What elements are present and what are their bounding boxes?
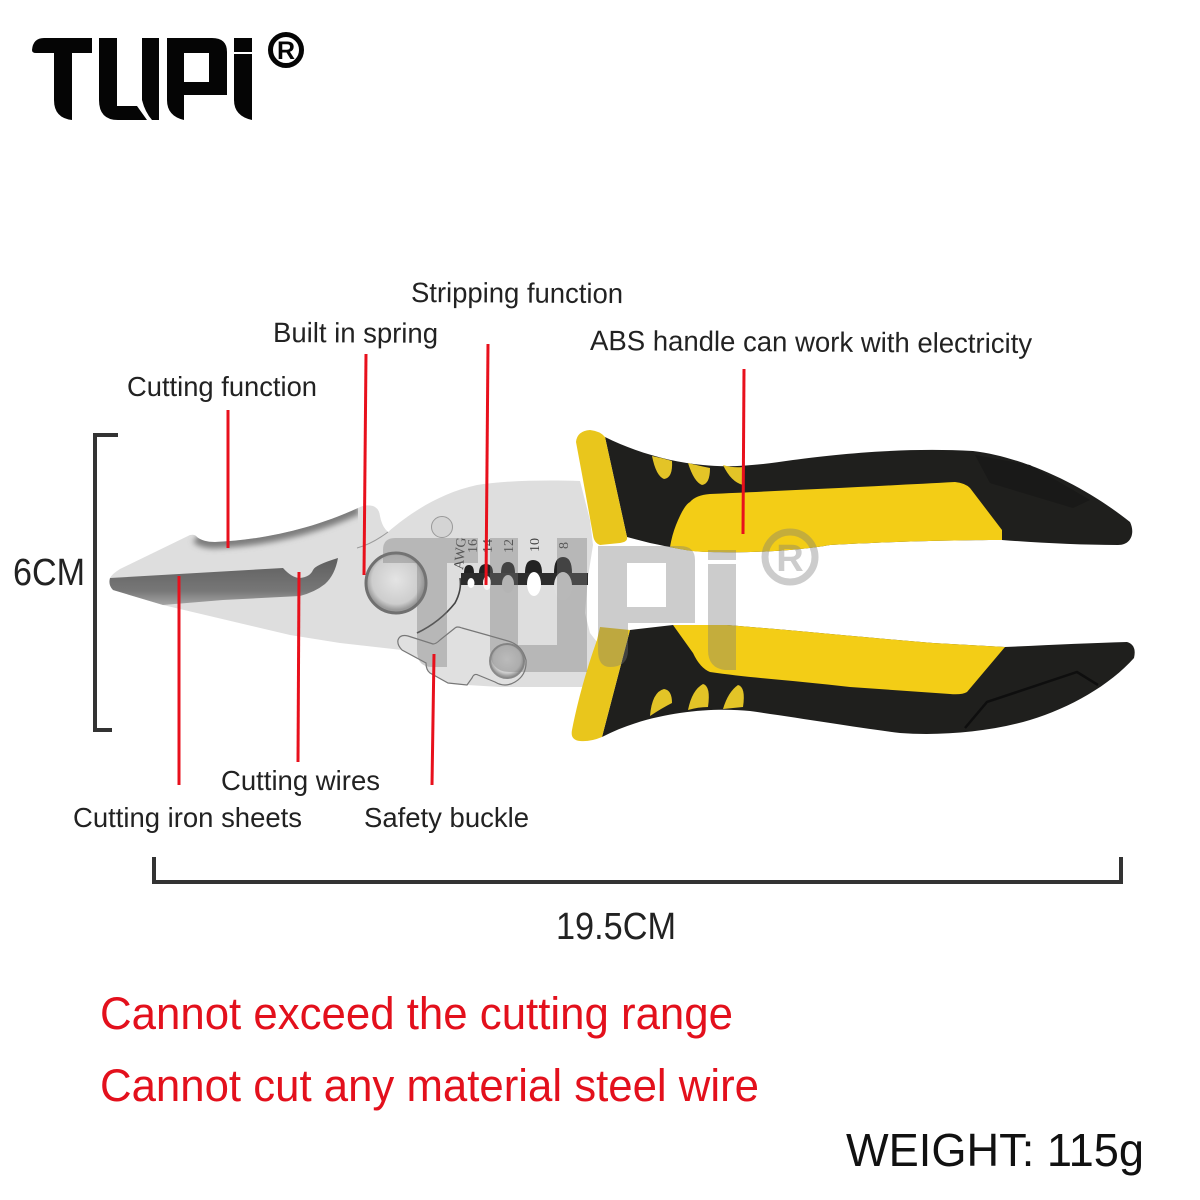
lower handle yellow panel <box>673 625 1005 694</box>
upper handle yellow tip <box>576 430 627 545</box>
safety buckle <box>398 627 526 685</box>
cutting notch shading <box>197 508 358 542</box>
upper handle yellow panel <box>670 482 1002 552</box>
label: ABS handle: ABS handle can work with electricity <box>590 325 1032 359</box>
lower grip texture <box>965 672 1098 728</box>
small rivet <box>490 644 524 678</box>
upper grip marks <box>652 456 743 485</box>
AWG markings: AWG <box>452 537 470 570</box>
stripping holes <box>461 557 588 600</box>
watermark: R <box>776 538 804 580</box>
AWG markings: 8 <box>557 542 572 549</box>
upper grip texture <box>975 455 1090 508</box>
length label: 19.5CM <box>556 906 676 948</box>
AWG markings <box>452 537 572 570</box>
label: Cutting iron sheets: Cutting iron sheets <box>73 802 302 833</box>
lower grip marks <box>650 684 744 716</box>
steel body <box>110 480 598 687</box>
AWG markings: 14 <box>481 539 496 553</box>
label: Stripping function: Stripping function <box>411 277 623 309</box>
small hole <box>432 516 452 538</box>
pivot rivet <box>366 553 426 613</box>
logo: TUPI <box>32 34 302 120</box>
label: Cutting function: Cutting function <box>127 371 317 402</box>
lower handle black <box>602 625 1135 737</box>
jaw curve <box>417 578 460 633</box>
red callout lines <box>179 344 744 785</box>
label: Cutting wires: Cutting wires <box>221 765 380 796</box>
label: Safety buckle: Safety buckle <box>364 802 529 833</box>
height label: 6CM <box>13 552 85 594</box>
pliers illustration <box>109 430 1135 741</box>
warning 2: Cannot cut any material steel wire <box>100 1060 759 1111</box>
blade recess <box>109 558 338 605</box>
AWG markings: 12 <box>502 539 517 553</box>
lower handle yellow tip <box>572 627 630 741</box>
plate seam <box>357 532 388 548</box>
height bracket <box>95 435 118 730</box>
label: Built in spring: Built in spring <box>273 317 438 349</box>
logo: TUPI: R <box>277 37 295 65</box>
warning 1: Cannot exceed the cutting range <box>100 988 733 1039</box>
weight: WEIGHT: 115g <box>846 1124 1144 1176</box>
upper handle black <box>605 437 1132 552</box>
length bracket <box>154 857 1121 882</box>
AWG markings: 10 <box>528 538 543 552</box>
watermark <box>383 532 815 672</box>
AWG markings: 16 <box>466 539 481 553</box>
